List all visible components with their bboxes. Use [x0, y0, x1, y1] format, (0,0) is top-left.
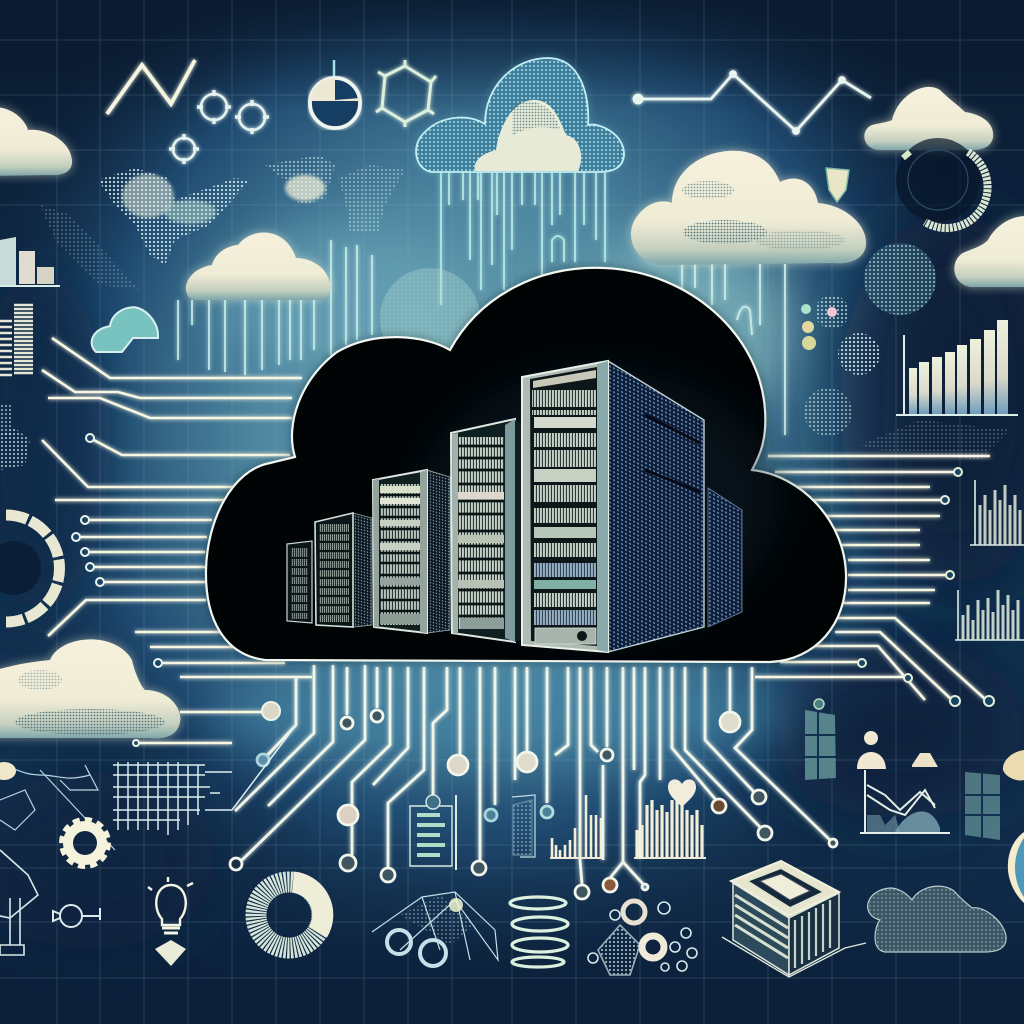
small bar chart with trace [550, 795, 604, 858]
large bar chart [634, 798, 706, 858]
icon: hexagon molecule [376, 60, 436, 127]
faint globe [380, 268, 480, 368]
line chart: top right [634, 72, 871, 134]
line chart: top left zigzag [107, 60, 195, 114]
line chart: lower right panel [860, 770, 950, 833]
bar chart: far left top [0, 237, 60, 375]
world map fragments [40, 155, 405, 290]
bottom circuit traces [235, 665, 830, 884]
cloud: large right of centre [631, 151, 866, 265]
server rack 5 side panel extension [708, 488, 742, 627]
left edge ring and network [0, 405, 59, 622]
server cube [722, 861, 866, 977]
icon: pie gauge [310, 60, 360, 128]
server rack 5 [522, 361, 704, 652]
bottom trace nodes [230, 710, 837, 899]
cloud: mesh dotted with inner cream cloud [416, 58, 624, 172]
left circuit traces [42, 338, 312, 743]
donut chart [256, 882, 323, 948]
cloud: far right [954, 216, 1024, 287]
rain lines under mesh cloud [441, 172, 605, 305]
network triangle with rings [372, 892, 498, 966]
rain lines under large cloud [682, 264, 785, 435]
icon: key [53, 905, 100, 927]
server rack 2 [315, 513, 372, 627]
icon: arrowhead [155, 940, 186, 966]
server rack 3 [373, 470, 450, 633]
sketch chart: bottom centre [512, 795, 535, 857]
icons: small gears top [169, 90, 269, 164]
network sketch: lower left [0, 765, 115, 850]
right circuit traces [755, 456, 990, 700]
cloud: top right [864, 87, 993, 150]
main cloud shadow [206, 268, 846, 662]
cloud: top left [0, 107, 72, 176]
right trace nodes [858, 468, 994, 706]
satellite dish sketch [0, 850, 38, 955]
spheres [801, 243, 1010, 460]
icon: light bulb [148, 877, 193, 933]
icon: gear [62, 820, 108, 866]
icon: shield [826, 168, 849, 202]
icon: person [857, 731, 886, 769]
spring coil [510, 897, 568, 967]
icon: pedestal [912, 753, 938, 767]
left wireframe grid chart [113, 725, 296, 835]
bar chart: right [896, 320, 1018, 415]
rain lines under left cloud [178, 240, 372, 375]
gears and nodes cluster [588, 901, 697, 975]
bar charts: right edge [955, 480, 1024, 640]
cloud: right edge small [1003, 750, 1024, 781]
ring dial [896, 138, 988, 228]
left trace nodes [72, 434, 280, 746]
cloud: teal outline [92, 307, 158, 352]
cloud: dark dotted bottom right [868, 886, 1006, 952]
server rack 4 [451, 419, 522, 642]
cloud: left [186, 233, 330, 300]
globe: right edge [1008, 832, 1024, 903]
small circuit panel [410, 795, 456, 870]
main cloud [206, 268, 846, 662]
server rack 1 [287, 541, 312, 623]
cloud: lower left [0, 639, 180, 738]
icon: heart [668, 779, 696, 807]
panels: right lower dotted blocks [805, 699, 1000, 840]
glow node: left edge [0, 762, 16, 780]
